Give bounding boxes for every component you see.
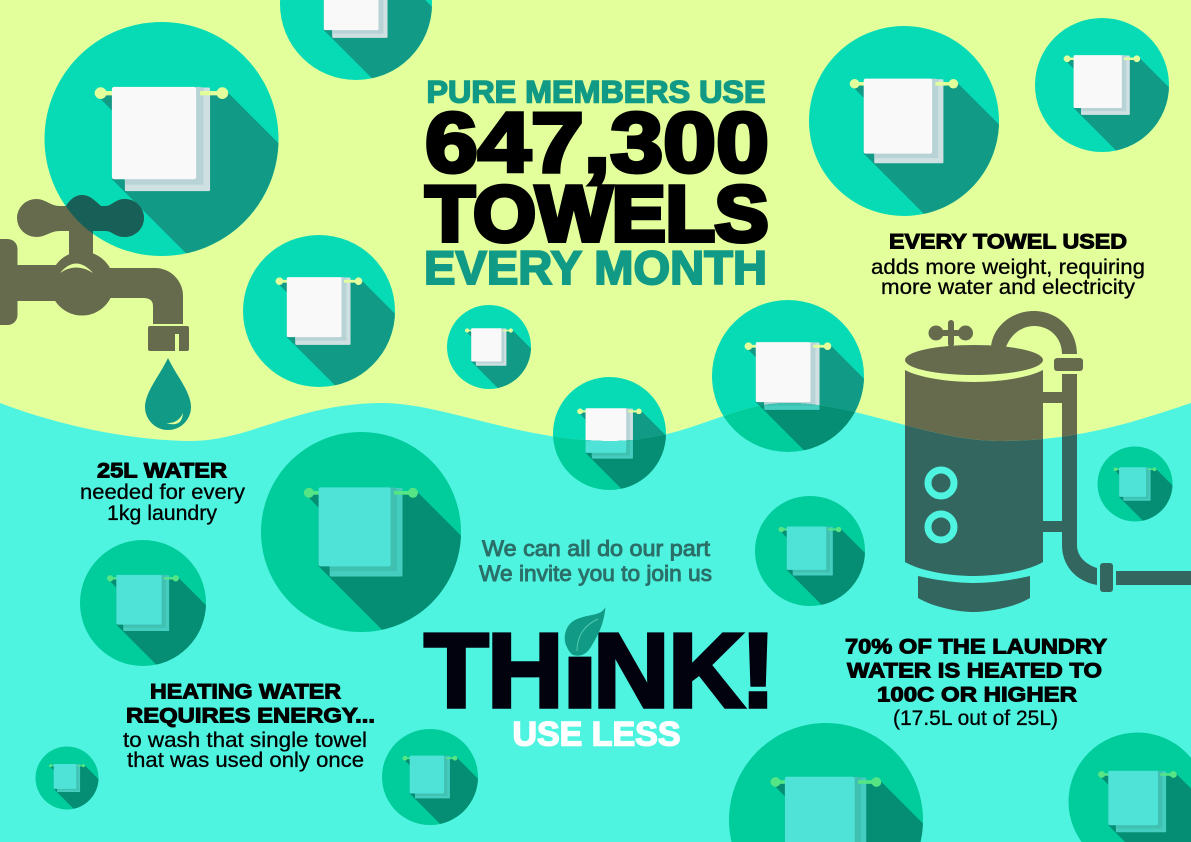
title line: pure members use: PURE MEMBERS USE bbox=[426, 73, 766, 109]
icon: water drop bbox=[145, 358, 191, 430]
logo word: NK bbox=[593, 612, 745, 730]
icon: underwater towel circle large bbox=[261, 432, 661, 842]
text block: 70 percent heated: 70% OF THE LAUNDRY bbox=[845, 636, 1107, 658]
logo: think use less bbox=[424, 607, 776, 754]
icon: underwater towel circle bottom left bbox=[36, 746, 162, 842]
text block: 25L water: needed for every bbox=[80, 481, 246, 504]
icon: towel circle top edge bbox=[280, 0, 584, 291]
text block: 25L water bbox=[80, 460, 246, 525]
icon: towel circle top right small bbox=[1035, 18, 1191, 338]
icon: towel circle centre small bbox=[447, 305, 615, 505]
text block: heating water: HEATING WATER bbox=[150, 680, 341, 704]
text block: invitation bbox=[479, 536, 712, 586]
text block: heating water bbox=[123, 680, 375, 772]
text block: invitation: We can all do our part bbox=[482, 536, 710, 561]
title line: towels: TOWELS bbox=[426, 170, 768, 258]
icon: towel circle large top left bbox=[44, 22, 512, 580]
text block: 70 percent heated bbox=[845, 636, 1107, 730]
icon: towel circle left middle bbox=[243, 235, 547, 598]
big number: 647,300 bbox=[425, 96, 769, 190]
icon: towel circle crossing waterline right bbox=[712, 300, 864, 452]
logo word: TH bbox=[424, 612, 564, 730]
icon: underwater towel circle bottom centre bbox=[382, 729, 574, 842]
icon: water heater tank bbox=[905, 311, 1191, 612]
text block: every towel used: adds more weight, requiring bbox=[871, 256, 1145, 279]
text block: heating water: to wash that single towel bbox=[123, 729, 367, 752]
icon: underwater towel circle bottom right bbox=[1068, 732, 1191, 842]
icon: underwater towel circle left bbox=[80, 540, 332, 841]
text block: 70 percent heated: WATER IS HEATED TO bbox=[847, 660, 1102, 682]
text block: heating water: that was used only once bbox=[127, 749, 364, 772]
text block: 25L water: 25L WATER bbox=[97, 460, 227, 482]
title bbox=[424, 73, 769, 294]
water wave bbox=[0, 403, 1191, 842]
title line: every month: EVERY MONTH bbox=[424, 241, 767, 294]
icon: towel circle top right large bbox=[809, 26, 1189, 479]
icon: underwater towel circle far right bbox=[1098, 446, 1191, 625]
tagline: USE LESS bbox=[512, 716, 680, 754]
logo word: i bbox=[562, 625, 598, 727]
logo word bbox=[424, 612, 776, 730]
icon: water tap bbox=[0, 195, 189, 351]
text block: every towel used bbox=[871, 230, 1145, 299]
text block: 70 percent heated: 100C OR HIGHER bbox=[877, 684, 1077, 706]
text block: invitation: We invite you to join us bbox=[479, 561, 712, 586]
icon: towel circle crossing waterline centre bbox=[553, 377, 666, 490]
icon: leaf bbox=[565, 607, 606, 656]
text block: 25L water: 1kg laundry bbox=[107, 502, 217, 525]
icon: underwater towel circle bottom bbox=[729, 723, 1117, 842]
icon: underwater towel circle middle right bbox=[755, 496, 975, 758]
text block: 70 percent heated: (17.5L out of 25L) bbox=[893, 707, 1058, 730]
logo word: ! bbox=[740, 612, 776, 730]
text block: every towel used: more water and electricity bbox=[881, 276, 1136, 299]
text block: every towel used: EVERY TOWEL USED bbox=[889, 230, 1127, 254]
text block: heating water: REQUIRES ENERGY... bbox=[126, 704, 375, 728]
